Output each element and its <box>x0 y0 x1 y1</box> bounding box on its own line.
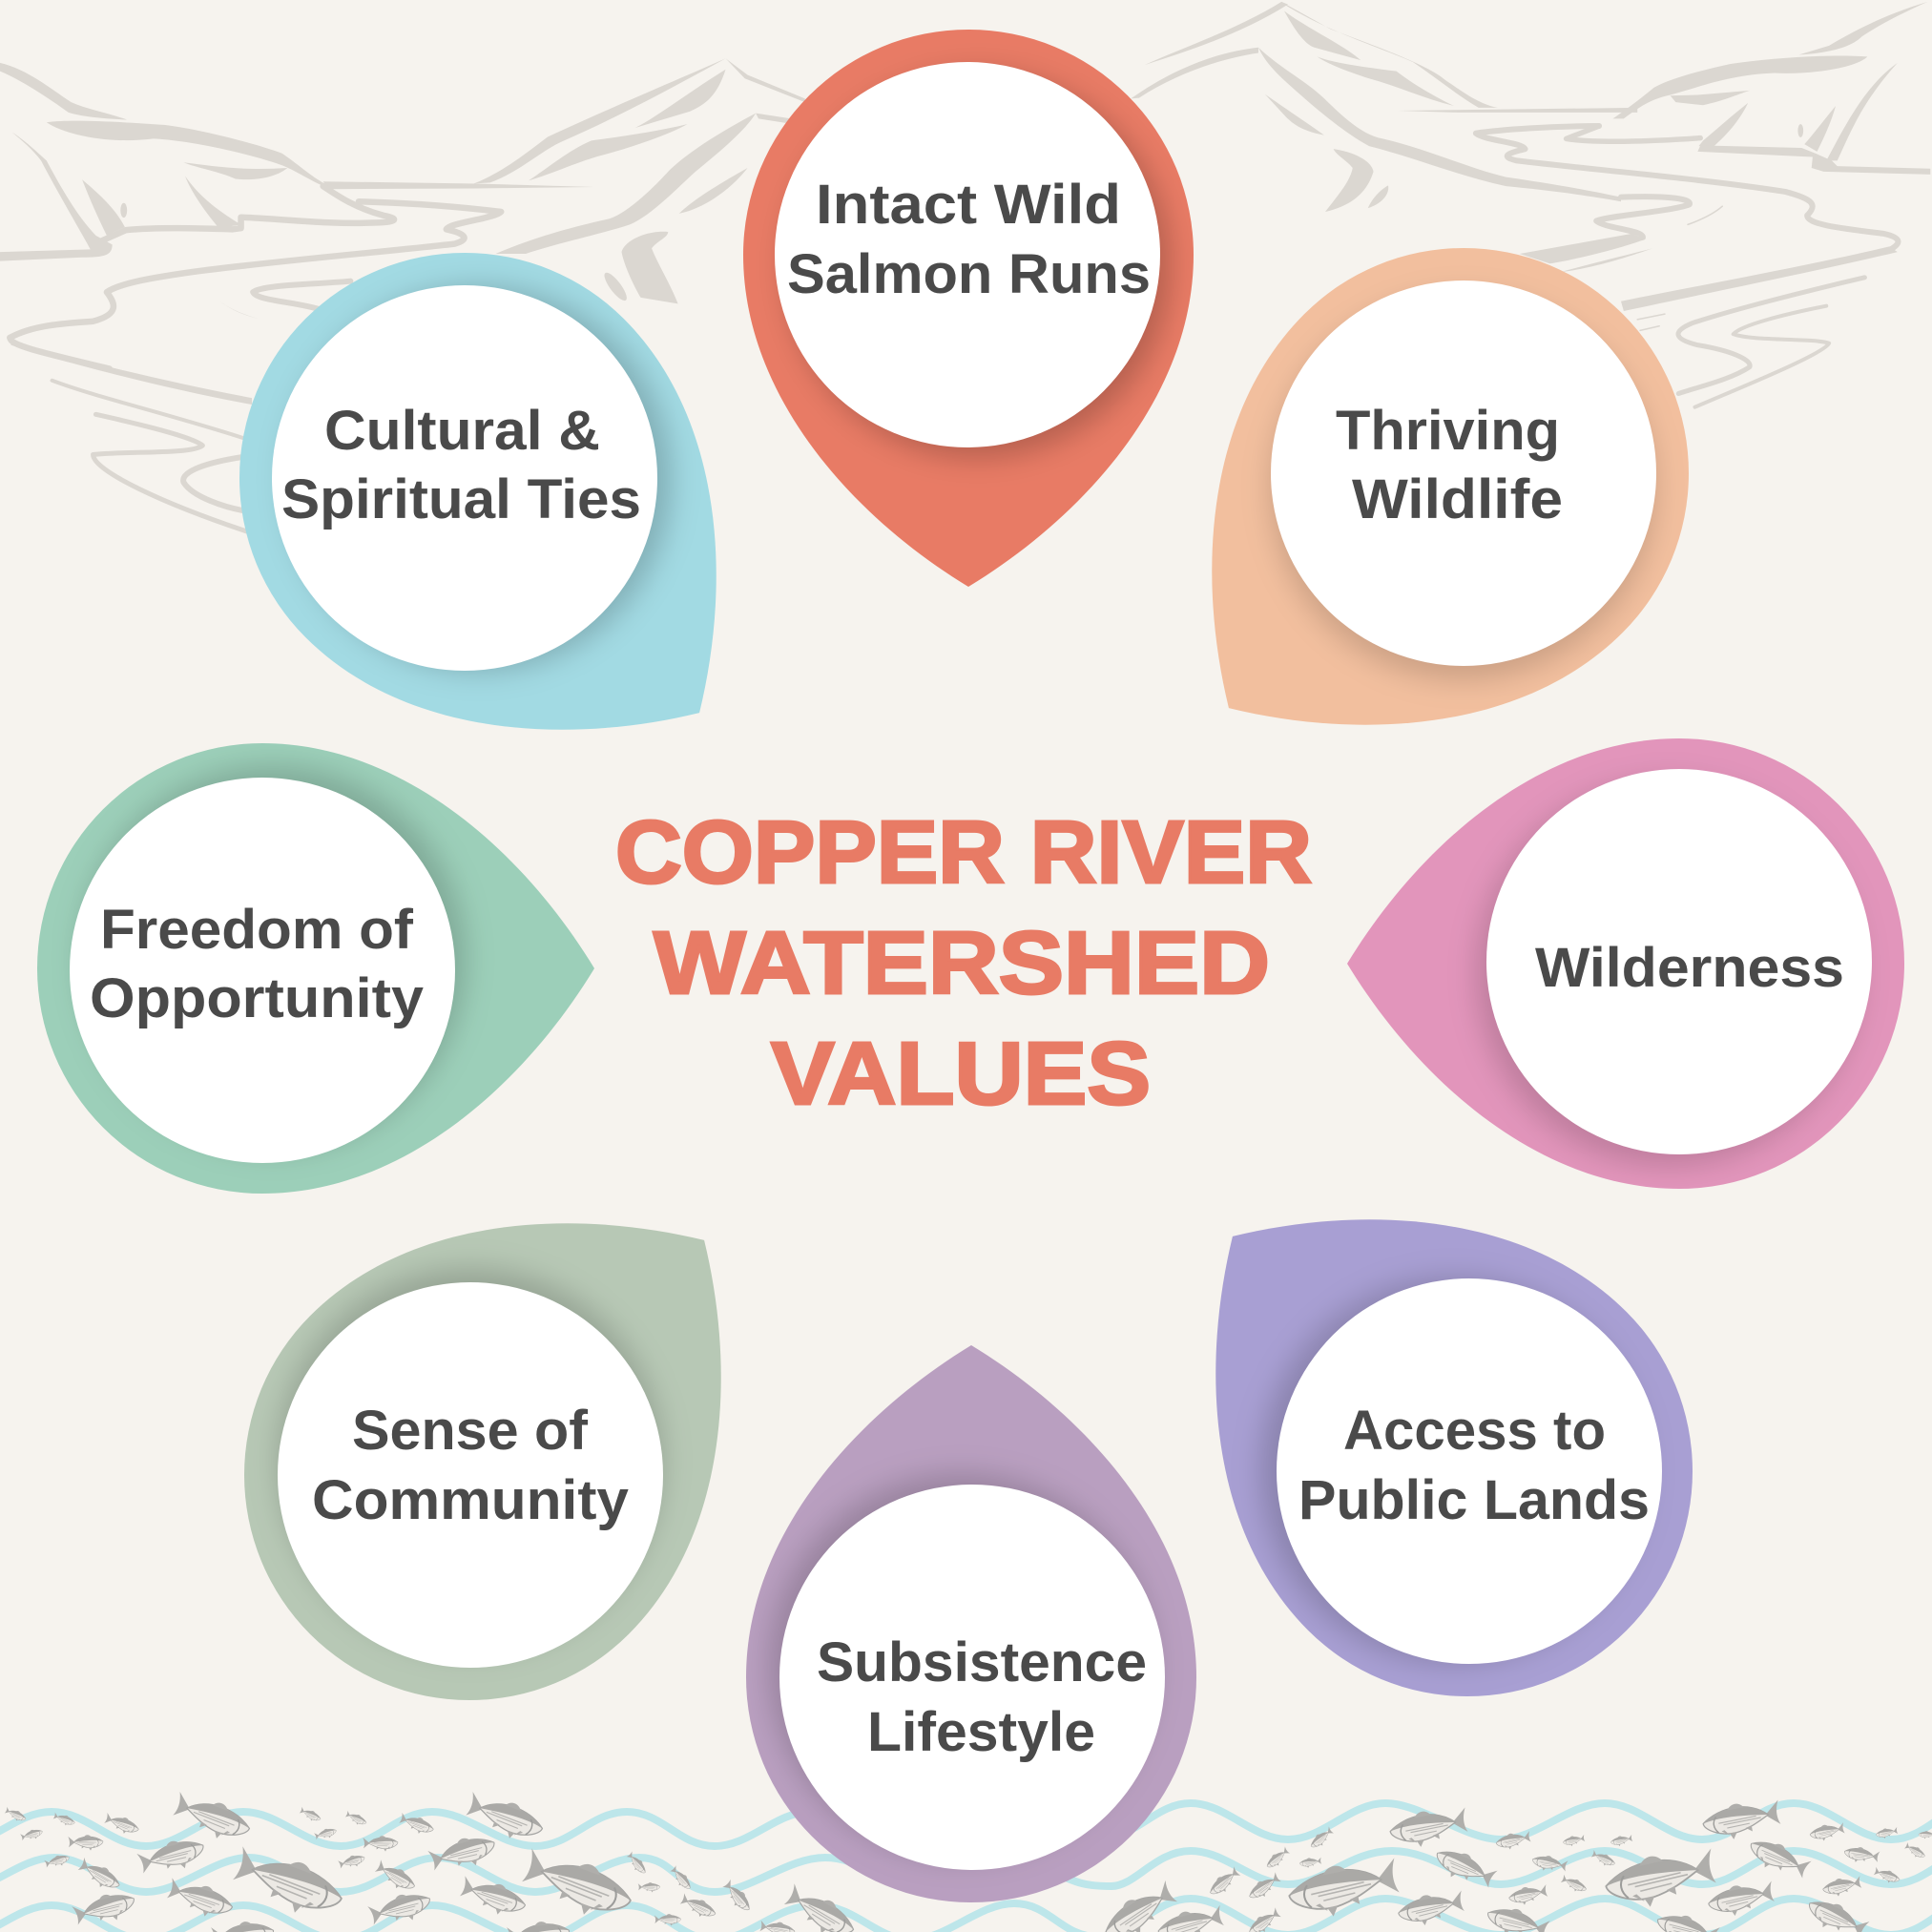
teardrop: Intact Wild Salmon Runs: Intact Wild <box>816 174 1121 236</box>
teardrop: Cultural & Spiritual Ties: Cultural & <box>324 400 600 462</box>
illustration: salmon school, left <box>3 1789 860 1932</box>
teardrop: Thriving Wildlife <box>1212 248 1689 725</box>
teardrop: Freedom of Opportunity: Freedom of <box>100 899 414 961</box>
title: VALUES <box>771 1024 1151 1123</box>
teardrop: Wilderness <box>1347 738 1904 1189</box>
teardrop: Sense of Community: Community <box>312 1469 629 1531</box>
teardrop: Subsistence Lifestyle <box>746 1345 1196 1902</box>
teardrop: Wilderness: Wilderness <box>1535 937 1844 999</box>
teardrop: Intact Wild Salmon Runs <box>743 30 1194 587</box>
illustration: right mountains and river <box>1131 2 1930 407</box>
teardrop: Thriving Wildlife: Thriving <box>1336 400 1560 462</box>
teardrop: Cultural & Spiritual Ties: Spiritual Ties <box>281 468 641 530</box>
teardrop: Sense of Community <box>244 1223 721 1700</box>
teardrop: Freedom of Opportunity <box>37 743 594 1194</box>
title <box>615 802 1312 1123</box>
teardrop: Subsistence Lifestyle: Subsistence <box>817 1631 1147 1693</box>
teardrop: Access to Public Lands: Public Lands <box>1298 1469 1650 1531</box>
illustration: river waves <box>0 1803 1932 1932</box>
teardrop: Access to Public Lands <box>1215 1219 1693 1696</box>
teardrop: Cultural & Spiritual Ties <box>239 253 717 730</box>
teardrop: Access to Public Lands: Access to <box>1343 1400 1606 1462</box>
teardrop: Freedom of Opportunity: Opportunity <box>90 967 424 1029</box>
teardrop: Subsistence Lifestyle: Lifestyle <box>867 1701 1095 1763</box>
illustration: left mountains and river <box>0 58 805 531</box>
teardrop: Sense of Community: Sense of <box>352 1400 589 1462</box>
title: COPPER RIVER <box>615 802 1312 902</box>
title: WATERSHED <box>654 913 1270 1012</box>
teardrop: Intact Wild Salmon Runs: Salmon Runs <box>787 243 1151 305</box>
teardrop: Thriving Wildlife: Wildlife <box>1352 468 1563 530</box>
illustration: salmon school, right <box>1098 1797 1932 1932</box>
